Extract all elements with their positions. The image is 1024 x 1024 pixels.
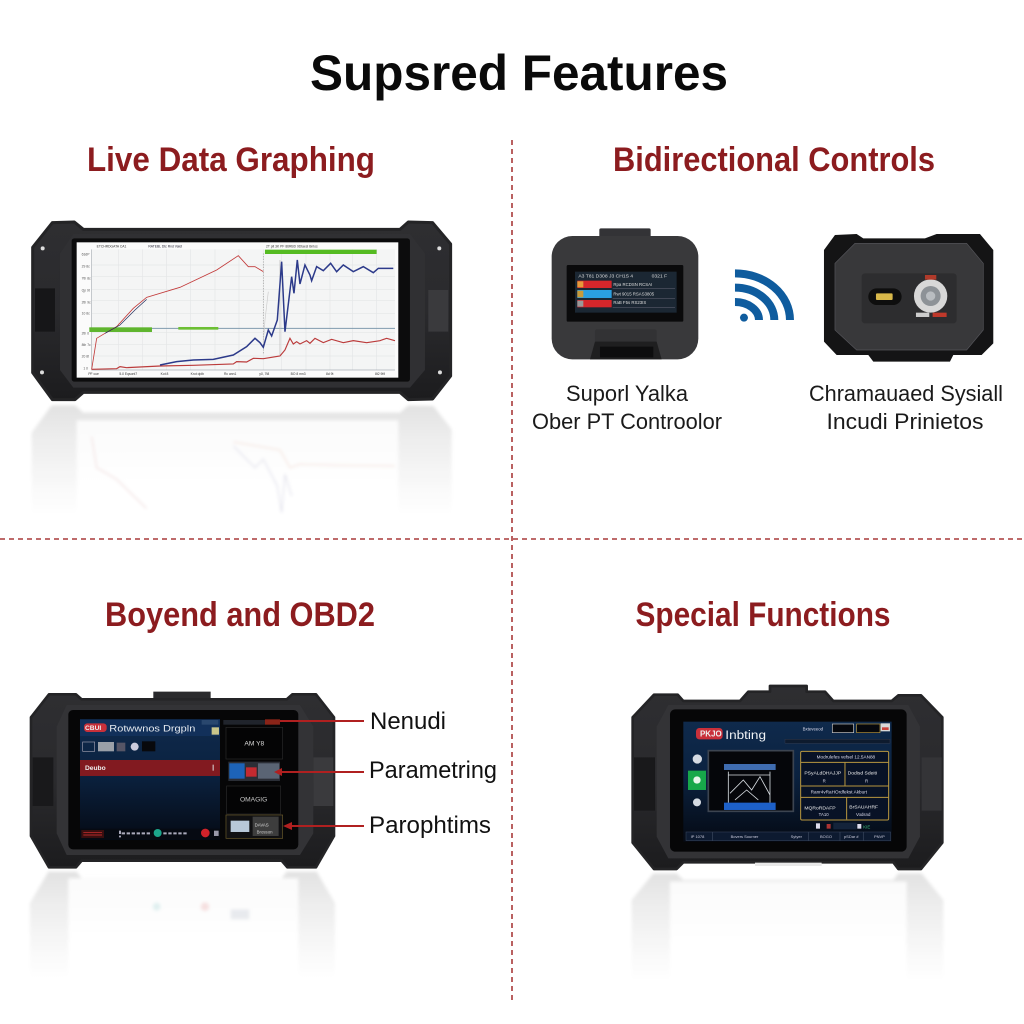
special functions screen: Bovers Sourner	[731, 834, 759, 839]
line chart screen: Kot 8	[161, 372, 169, 376]
special functions screen: Modrulefes vefsel 12.5AN88	[817, 755, 876, 760]
line chart screen: Rc ann1	[224, 372, 237, 376]
caption: left device: Suporl Yalka	[566, 381, 689, 406]
obd2 device	[31, 692, 334, 867]
obd dongle device	[552, 228, 698, 359]
reflection of graphing device	[32, 405, 452, 585]
obd2 screen: CBUI	[85, 725, 101, 732]
line chart screen: PF cue	[88, 372, 99, 376]
reflection of obd2 device	[30, 872, 335, 1024]
special functions screen: Inbting	[725, 728, 766, 742]
line chart screen: 8t2 9t9	[375, 372, 385, 376]
obd2 screen	[80, 719, 283, 840]
line chart screen: 10 8c	[82, 312, 90, 316]
special functions screen: MQRoRDAFP	[804, 805, 836, 811]
obd2 screen: DAVAS	[255, 823, 269, 828]
panel: special functions	[632, 596, 943, 1024]
graphing device	[33, 222, 451, 400]
line chart screen: 7th 8c	[82, 276, 91, 280]
line chart screen: 2T pit 3K PF 86RBD 9Dtaesl Bntos	[266, 245, 318, 249]
dongle screen	[575, 272, 677, 313]
line chart screen: Qp 9t	[82, 288, 90, 292]
title: Supsred Features	[310, 45, 728, 101]
special functions screen: R	[823, 779, 826, 784]
caption: left device: Ober PT Controolor	[532, 409, 722, 434]
special functions screen: PSyALdDHAJJP	[804, 771, 842, 777]
line chart screen: 29 8c	[82, 264, 90, 268]
special functions screen: Ranr4vRaHOrdfekst Akburt	[811, 789, 868, 794]
special functions screen: Bxteveeod	[803, 726, 824, 731]
line chart screen: 20 8t	[82, 354, 89, 358]
obd2 screen: Brosson	[257, 830, 273, 835]
line chart screen: 8th 7c	[82, 343, 91, 347]
obd2 screen: Deubo	[85, 765, 106, 772]
line chart screen: 1 0	[83, 366, 88, 370]
line chart screen	[77, 242, 398, 378]
callout: nenudi: Nenudi	[370, 708, 446, 735]
obd2 screen: AM Y8	[244, 741, 265, 748]
panel: bidirectional controls	[532, 141, 1003, 434]
special functions screen: pSDar #	[844, 834, 859, 839]
caption: left device	[532, 381, 722, 434]
special functions screen: R	[865, 779, 868, 784]
dongle screen: 0321 F	[652, 274, 667, 280]
line chart screen: y0, 7t8	[259, 372, 269, 376]
callout: parametring	[274, 757, 497, 784]
icon: wireless signal	[735, 273, 790, 322]
heading: live data graphing: Live Data Graphing	[87, 141, 375, 179]
special functions screen: TA10	[819, 812, 829, 817]
obd2 screen: Rotwwnos Drgpln	[109, 724, 195, 734]
callout: parophtims	[283, 812, 491, 839]
heading: beyond obd2: Boyend and OBD2	[105, 596, 375, 634]
line chart screen: 5.0 Eqsont7	[119, 372, 137, 376]
line chart screen: Krot dplb	[191, 372, 204, 376]
line chart screen: 2th 9c	[82, 300, 91, 304]
heading: bidirectional controls: Bidirectional Controls	[613, 141, 935, 179]
line chart screen: ETCHRDGATA CA1	[97, 245, 126, 249]
caption: right device: Chramauaed Sysiall	[809, 381, 1003, 406]
special functions screen: Dodisd Sdeiti	[848, 771, 877, 777]
heading: special functions: Special Functions	[636, 596, 890, 634]
special functions screen: BOGO	[820, 834, 832, 839]
line chart screen: 63dP	[82, 252, 90, 256]
dongle screen: RaB F5s RS23IS	[613, 300, 646, 305]
special functions screen: BrSAUAHRF	[849, 805, 878, 811]
reflection of special functions device	[632, 873, 943, 1024]
special functions screen: Vodsnd	[856, 812, 871, 817]
special functions screen	[683, 722, 892, 842]
special functions screen: KIE	[863, 824, 870, 829]
caption: right device	[809, 381, 1003, 434]
panel: live data graphing	[32, 141, 452, 585]
vehicle control module	[824, 234, 993, 362]
dongle screen: Rpa RCDSN RCSAI	[613, 282, 652, 287]
caption: right device: Incudi Prinietos	[826, 409, 984, 434]
callout: parametring: Parametring	[369, 757, 497, 784]
special functions device	[633, 686, 942, 869]
obd2 screen: OMAGIG	[240, 797, 267, 804]
callout: parophtims: Parophtims	[369, 812, 491, 839]
line chart screen: 8d 9t	[326, 372, 333, 376]
line chart screen: BO 8 mn3	[291, 372, 306, 376]
panel: beyond obd2	[30, 596, 497, 1024]
special functions screen: IP 1078	[691, 834, 705, 839]
special functions screen: PKJO	[700, 730, 722, 739]
special functions screen: PNVP	[874, 834, 885, 839]
line chart screen: RATEBL Dtc Rnd Valot	[148, 245, 182, 249]
dongle screen: A3 T81 D308 J3 CH1S 4	[578, 274, 633, 280]
dongle screen: Rwt 9015 RSAS3805	[613, 291, 655, 296]
special functions screen: Sytyer	[791, 834, 803, 839]
line chart screen: 2th 0	[82, 332, 89, 336]
